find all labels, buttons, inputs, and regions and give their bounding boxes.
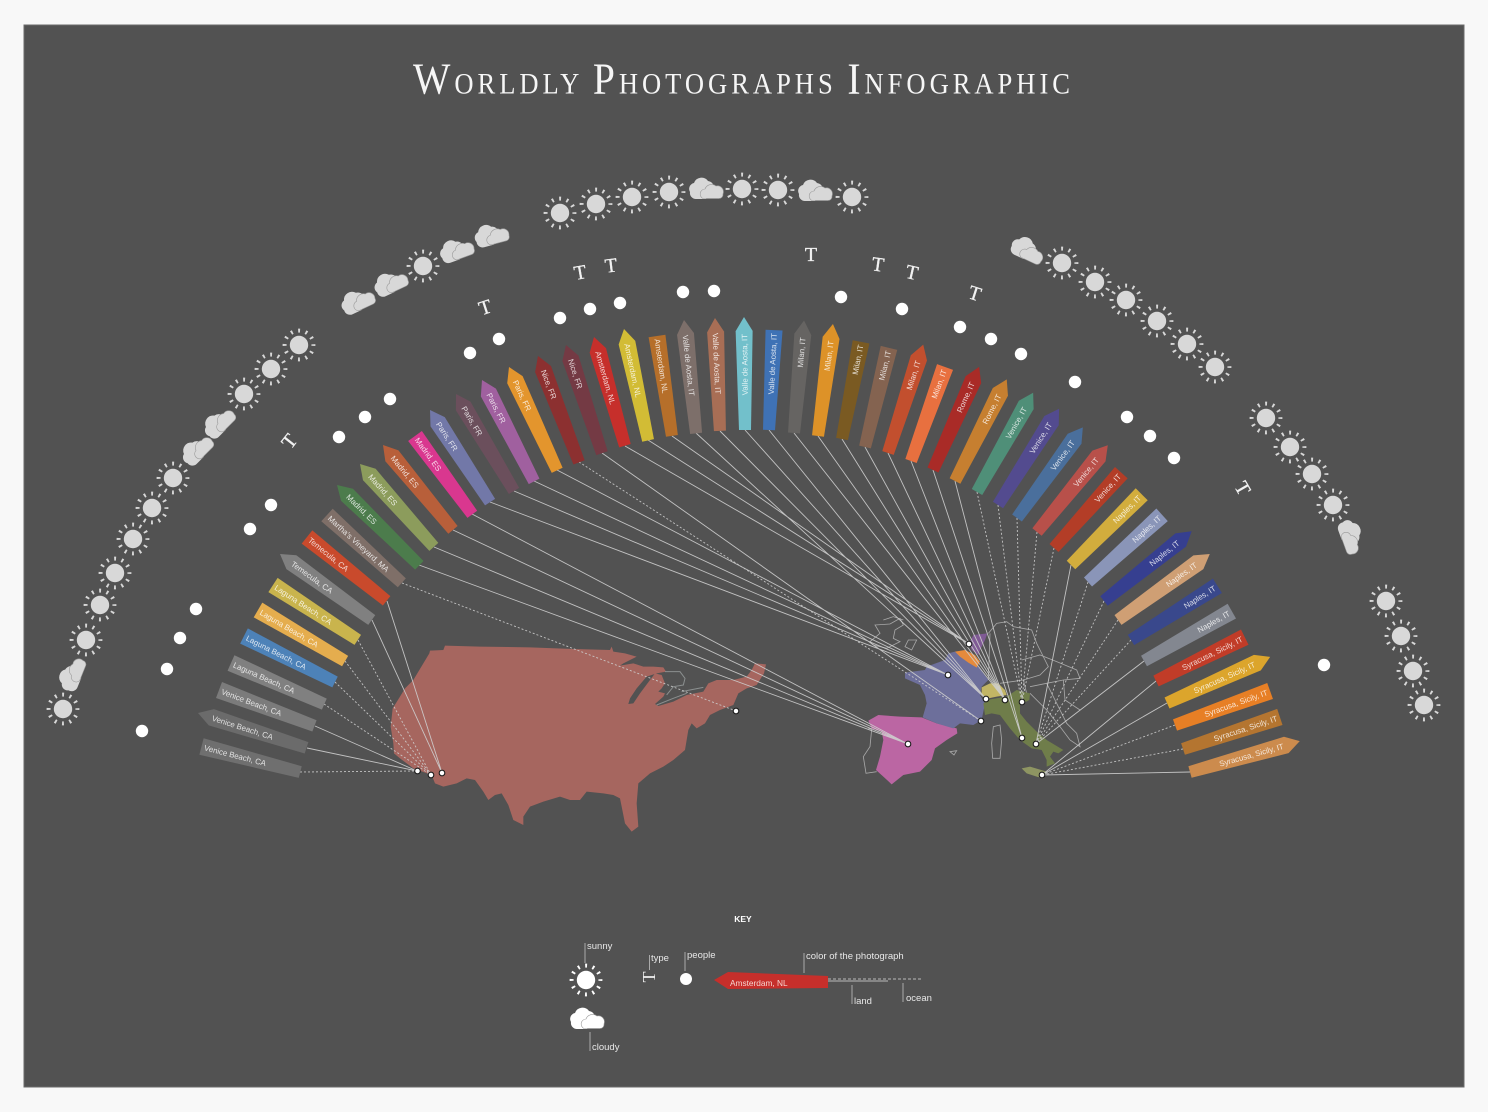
photograph arrows fan	[195, 317, 1302, 780]
arrow: Venice Beach, CA 1: Venice Beach, CA	[203, 743, 268, 768]
arrow: Naples, IT 5	[1126, 579, 1222, 647]
key: cloudy	[570, 1008, 620, 1053]
arrow: Temecula, CA 1	[275, 547, 377, 627]
arrow: Milan, IT 4: Milan, IT	[877, 350, 893, 381]
arrow: Naples, IT 5: Naples, IT	[1182, 584, 1218, 611]
arrow: Madrid, ES 1: Madrid, ES	[344, 493, 378, 526]
arrow: Nice, FR 1: Nice, FR	[539, 369, 558, 401]
arrow: Martha's Vineyard, MA: Martha's Vineyard, MA	[326, 514, 391, 575]
arrow: Amsterdam, NL 3	[649, 335, 680, 437]
arrow: Nice, FR 2	[558, 342, 610, 456]
arrow: Paris, FR 1	[423, 405, 497, 507]
type markers: T	[1230, 478, 1255, 499]
arrow: Milan, IT 2	[810, 323, 841, 437]
arrow: Valle de Aosta, IT 2: Valle de Aosta, IT	[711, 333, 722, 395]
arrow: Venice Beach, CA 3: Venice Beach, CA	[220, 687, 283, 718]
arrow: Naples, IT 1	[1065, 488, 1148, 571]
arrow: Madrid, ES 4	[408, 431, 479, 519]
type markers: T	[965, 282, 984, 306]
arrow: Martha's Vineyard, MA	[321, 509, 408, 589]
title: WORLDLY PHOTOGRAPHS INFOGRAPHIC	[413, 56, 1070, 104]
arrow: Laguna Beach, CA 3	[254, 603, 349, 668]
arrow: Madrid, ES 4: Madrid, ES	[413, 436, 443, 473]
arrow: Paris, FR 3: Paris, FR	[484, 392, 508, 425]
arrow: Naples, IT 6: Naples, IT	[1196, 609, 1232, 635]
key: sunny: sunny	[587, 941, 613, 952]
arrow: Amsterdam, NL 1: Amsterdam, NL	[593, 350, 617, 406]
arrow: Syracusa, Sicily, IT 3	[1172, 683, 1273, 733]
arrow: Rome, IT 1	[925, 363, 987, 473]
arrow: Laguna Beach, CA 4: Laguna Beach, CA	[273, 583, 334, 627]
arrow: Madrid, ES 2: Madrid, ES	[366, 473, 399, 508]
arrow: Madrid, ES 1	[331, 479, 425, 571]
arrow: Milan, IT 4	[857, 346, 897, 449]
arrow: Laguna Beach, CA 3: Laguna Beach, CA	[258, 608, 320, 650]
arrow: Milan, IT 3	[834, 340, 869, 441]
type markers: T	[277, 430, 302, 453]
arrow: Venice, IT 3	[1010, 422, 1090, 523]
arrow: Temecula, CA 1: Temecula, CA	[289, 560, 335, 596]
arrow: Milan, IT 6	[903, 364, 953, 464]
arrow: Venice, IT 3: Venice, IT	[1049, 439, 1077, 472]
arrow: Venice Beach, CA 2: Venice Beach, CA	[211, 714, 275, 742]
arrow: Valle de Aosta, IT 4: Valle de Aosta, IT	[767, 333, 779, 395]
arrow: Venice Beach, CA 3	[216, 682, 317, 734]
arrow: Valle de Aosta, IT 1	[676, 319, 705, 434]
arrow: Syracusa, Sicily, IT 2: Syracusa, Sicily, IT	[1192, 660, 1257, 696]
type markers: T	[805, 244, 817, 266]
arrow: Syracusa, Sicily, IT 1: Syracusa, Sicily, IT	[1181, 635, 1244, 672]
arrow: Syracusa, Sicily, IT 2	[1164, 649, 1274, 711]
type markers: T	[903, 261, 920, 285]
arrow: Syracusa, Sicily, IT 3: Syracusa, Sicily, IT	[1203, 688, 1269, 719]
key: people	[680, 950, 716, 985]
arrow: Venice, IT 5	[1048, 467, 1128, 554]
key: type: T	[639, 972, 659, 982]
arrow: Syracusa, Sicily, IT 5	[1188, 733, 1302, 780]
key: land line	[828, 981, 888, 1007]
arrow: Milan, IT 2: Milan, IT	[823, 340, 836, 372]
people dots	[136, 285, 1330, 737]
key: type	[639, 953, 669, 982]
arrow: Venice Beach, CA 1	[199, 738, 302, 780]
key: type: type	[651, 953, 669, 964]
arrow: Valle de Aosta, IT 3: Valle de Aosta, IT	[740, 334, 750, 395]
arrow: Amsterdam, NL 1	[586, 335, 633, 448]
arrow: Rome, IT 1: Rome, IT	[955, 381, 977, 414]
location markers	[415, 641, 1045, 778]
arrow: Milan, IT 5: Milan, IT	[905, 359, 923, 391]
arrow: Syracusa, Sicily, IT 1	[1152, 630, 1249, 689]
arrow: Naples, IT 1: Naples, IT	[1111, 493, 1143, 525]
map: United States	[391, 646, 766, 832]
key: color of the photograph arrow: color of the photograph	[806, 951, 904, 962]
arrow: Venice, IT 4: Venice, IT	[1072, 456, 1101, 489]
arrow: Paris, FR 2	[449, 390, 521, 495]
arrow: Paris, FR 4	[501, 363, 565, 474]
arrow: Naples, IT 4	[1113, 547, 1215, 627]
arrow: Amsterdam, NL 3: Amsterdam, NL	[652, 338, 670, 395]
arrow: Venice, IT 1	[970, 389, 1041, 496]
key: color of the photograph arrow	[714, 951, 904, 989]
arrow: Milan, IT 1: Milan, IT	[796, 337, 808, 368]
key heading: KEY	[734, 914, 752, 924]
arrow: Rome, IT 2	[947, 376, 1014, 485]
arrow: Venice Beach, CA 2	[195, 705, 309, 756]
arrow: Milan, IT 1	[786, 320, 813, 434]
arrow: Paris, FR 1: Paris, FR	[434, 420, 460, 453]
key legend	[570, 914, 932, 1053]
type markers	[277, 244, 1255, 499]
key: cloudy: cloudy	[592, 1042, 620, 1053]
type markers: T	[476, 296, 495, 320]
arrow: Laguna Beach, CA 1	[228, 655, 328, 712]
arrow: Laguna Beach, CA 2	[240, 628, 339, 690]
arrow: Milan, IT 5	[880, 342, 931, 456]
arrow: Temecula, CA 2: Temecula, CA	[306, 536, 351, 574]
type markers: T	[870, 253, 885, 277]
arrow: Amsterdam, NL 2	[616, 327, 656, 442]
arrow: Milan, IT 3: Milan, IT	[851, 344, 865, 375]
arrow: Madrid, ES 3: Madrid, ES	[389, 454, 420, 490]
arrow: Naples, IT 2	[1082, 509, 1168, 588]
arrow: Rome, IT 2: Rome, IT	[981, 393, 1004, 426]
type markers: T	[604, 254, 619, 278]
arrow: Nice, FR 1	[530, 353, 587, 465]
arrow: Naples, IT 4: Naples, IT	[1164, 561, 1199, 589]
map: Europe	[863, 617, 1080, 784]
key: ocean line	[828, 979, 932, 1004]
neighbouring country outlines	[863, 617, 1080, 773]
arrow: Laguna Beach, CA 2: Laguna Beach, CA	[244, 634, 308, 672]
arrow: Amsterdam, NL 2: Amsterdam, NL	[622, 343, 643, 399]
arrow: Naples, IT 6	[1140, 604, 1236, 668]
arrow: Venice, IT 4	[1030, 440, 1114, 537]
arrow: Naples, IT 3	[1099, 525, 1197, 608]
arrow: Valle de Aosta, IT 4	[761, 330, 783, 430]
arrow: Syracusa, Sicily, IT 4: Syracusa, Sicily, IT	[1213, 714, 1279, 744]
arrow: Paris, FR 3	[474, 376, 542, 485]
key: sunny	[572, 941, 613, 994]
arrow: Milan, IT 6: Milan, IT	[930, 368, 949, 400]
connector lines: land solid, ocean dashed	[300, 430, 1190, 775]
arrow: Paris, FR 2: Paris, FR	[459, 405, 484, 438]
arrow: Valle de Aosta, IT 3	[736, 317, 753, 430]
arrow: Madrid, ES 3	[376, 440, 460, 535]
arrow: Temecula, CA 2	[302, 530, 392, 607]
key: land line: land	[854, 996, 872, 1007]
arrow: Valle de Aosta, IT 2	[707, 318, 728, 431]
key: people: people	[687, 950, 716, 961]
weather icons arc	[49, 175, 1438, 723]
key: ocean line: ocean	[906, 993, 932, 1004]
arrow: Madrid, ES 2	[354, 458, 440, 553]
arrow: Naples, IT 3: Naples, IT	[1148, 539, 1182, 568]
arrow: Laguna Beach, CA 1: Laguna Beach, CA	[232, 661, 297, 696]
arrow: Laguna Beach, CA 4	[268, 578, 362, 647]
arrow: Venice, IT 2: Venice, IT	[1028, 421, 1054, 455]
key: color of the photograph arrow: Amsterdam, NL	[730, 978, 788, 988]
arrow: Syracusa, Sicily, IT 4	[1180, 709, 1283, 757]
arrow: Valle de Aosta, IT 1: Valle de Aosta, IT	[681, 334, 696, 397]
arrow: Naples, IT 2: Naples, IT	[1131, 514, 1163, 545]
arrow: Syracusa, Sicily, IT 5: Syracusa, Sicily, IT	[1218, 742, 1285, 769]
arrow: Venice, IT 1: Venice, IT	[1004, 405, 1029, 441]
type markers: T	[572, 261, 588, 285]
arrow: Venice, IT 5: Venice, IT	[1093, 472, 1123, 504]
arrow: Paris, FR 4: Paris, FR	[511, 379, 533, 413]
arrow: Venice, IT 2	[991, 404, 1066, 510]
arrow: Nice, FR 2: Nice, FR	[566, 358, 584, 390]
